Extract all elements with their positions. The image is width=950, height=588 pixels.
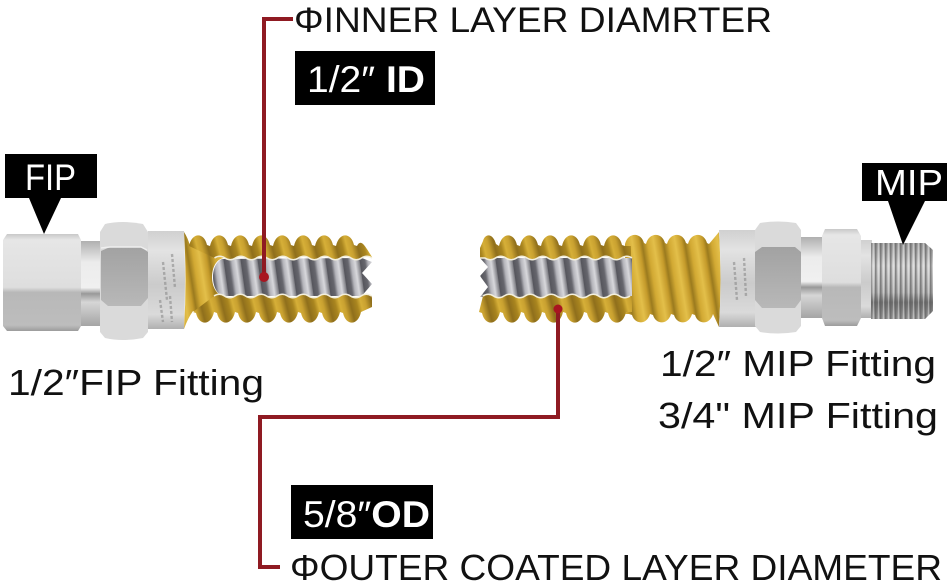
- FIP nut: [3, 234, 81, 331]
- stainless inner tube: [213, 258, 372, 298]
- top wall: [480, 235, 631, 260]
- bottom wall: [479, 294, 632, 323]
- solid coil: [184, 232, 224, 329]
- bottom wall: [193, 294, 372, 323]
- right gold coated hose cutaway: [479, 232, 720, 327]
- compression body: [719, 230, 756, 327]
- union nut: [822, 229, 861, 326]
- left hose fitting: [3, 222, 185, 340]
- MIP marker: [862, 162, 947, 245]
- white cut edges: [480, 256, 632, 298]
- outer diameter badge: [291, 485, 433, 539]
- inner diameter badge: [295, 51, 435, 105]
- left gold coated hose cutaway: [184, 232, 372, 329]
- FIP marker: [5, 154, 97, 234]
- inner layer leader line: [259, 19, 293, 282]
- hex nut: [755, 222, 801, 334]
- MIP marker: MIP: [875, 162, 943, 203]
- FIP marker: FIP: [25, 157, 76, 198]
- inner diameter badge: 1/2″ ID: [307, 59, 425, 100]
- outer diameter badge: 5/8″OD: [303, 494, 430, 535]
- fitting neck: [81, 241, 101, 326]
- male pipe thread: [861, 240, 933, 319]
- hex nut: [100, 222, 148, 340]
- fitting neck: [801, 237, 823, 318]
- MIP fitting labels: [658, 343, 938, 436]
- stainless inner tube: [480, 258, 632, 297]
- outer layer heading: ΦOUTER COATED LAYER DIAMETER: [290, 547, 942, 588]
- compression body: [148, 231, 185, 329]
- FIP fitting label: 1/2″FIP Fitting: [8, 362, 264, 403]
- outer layer leader line: [260, 304, 562, 567]
- MIP fitting labels: 1/2″ MIP Fitting: [660, 343, 936, 384]
- white cut edges: [214, 256, 372, 298]
- right hose fitting: [719, 222, 933, 334]
- inner layer heading: ΦINNER LAYER DIAMRTER: [294, 1, 772, 40]
- MIP fitting labels: 3/4" MIP Fitting: [658, 395, 938, 436]
- solid coil: [625, 232, 720, 327]
- top wall: [189, 235, 372, 260]
